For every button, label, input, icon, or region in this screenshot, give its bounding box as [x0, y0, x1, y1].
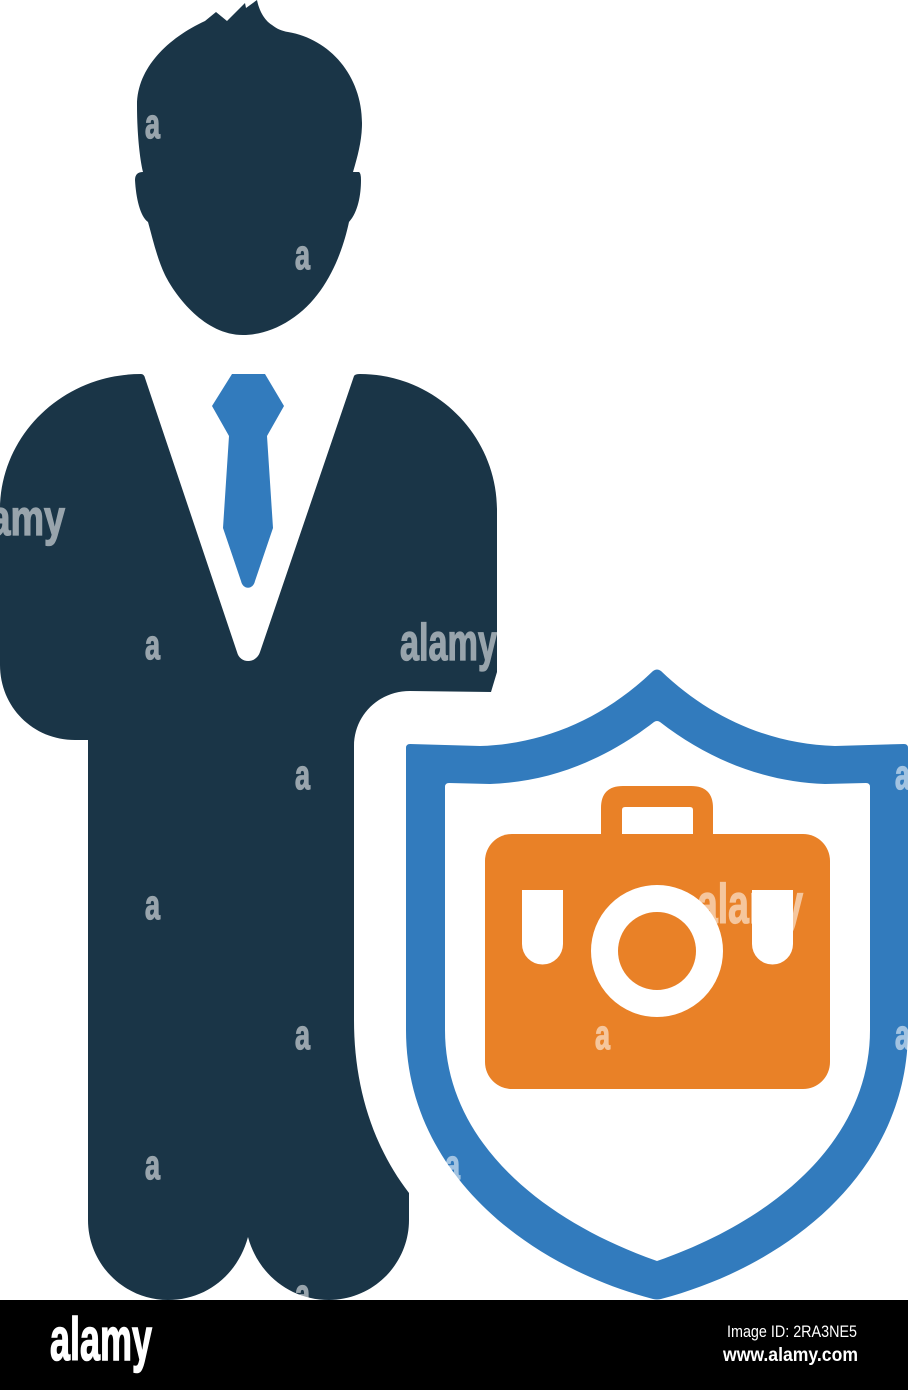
icon: shield: [406, 670, 908, 1300]
briefcase case: [485, 834, 830, 1089]
watermark text: alamy: [400, 614, 497, 672]
watermark text: a: [295, 1011, 310, 1058]
watermark text: a: [145, 100, 160, 147]
icon: briefcase: [485, 786, 830, 1089]
icon: businessman head: [135, 0, 362, 335]
briefcase centre ring: [604, 898, 710, 1004]
footer logo: alamy: alamy: [50, 1306, 152, 1373]
footer bar: [0, 1300, 908, 1390]
watermark text: a: [295, 1270, 310, 1317]
watermark text: alamy: [697, 872, 803, 935]
footer website: www.alamy.com: [722, 1345, 858, 1366]
icon: necktie: [212, 374, 284, 588]
watermark text: a: [145, 621, 160, 668]
watermark text: a: [595, 1011, 610, 1058]
watermark text: a: [295, 231, 310, 278]
briefcase handle: [601, 786, 713, 840]
watermark text: a: [295, 751, 310, 798]
briefcase right pocket: [752, 890, 793, 964]
watermark text: a: [445, 1141, 460, 1188]
icon: businessman suit body: [0, 374, 497, 1300]
footer image id: Image ID: 2RA3NE5: [727, 1322, 857, 1341]
watermark text: a: [145, 1141, 160, 1188]
briefcase left pocket: [522, 890, 563, 964]
watermark text: a: [145, 881, 160, 928]
